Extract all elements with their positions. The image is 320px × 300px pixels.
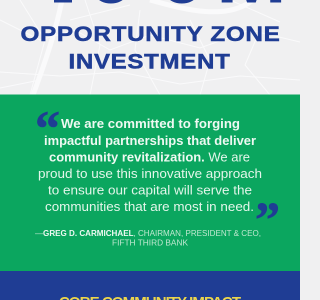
quote text: communities that are most in need. xyxy=(45,200,254,214)
quote text: community revitalization. We are xyxy=(49,150,250,164)
attribution xyxy=(35,229,261,248)
panel: green quote xyxy=(0,94,300,272)
quote text xyxy=(38,117,262,214)
attribution: —GREG D. CARMICHAEL, CHAIRMAN, PRESIDENT & CEO, xyxy=(35,229,261,238)
icon: opening quote mark: “ xyxy=(35,100,60,156)
title: INVESTMENT xyxy=(68,50,230,74)
quote text: impactful partnerships that deliver xyxy=(44,134,256,148)
title xyxy=(20,23,280,74)
quote text: proud to use this innovative approach xyxy=(38,167,262,181)
panel: map background xyxy=(0,0,300,95)
quote text: to ensure our capital will serve the xyxy=(48,184,252,198)
title: OPPORTUNITY ZONE xyxy=(20,23,280,46)
quote text: We are committed to forging xyxy=(61,117,240,131)
icon: closing quote mark: ” xyxy=(255,191,280,247)
panel: blue footer xyxy=(0,271,300,300)
big figure, cropped at top edge xyxy=(54,0,282,4)
attribution: FIFTH THIRD BANK xyxy=(112,239,189,248)
